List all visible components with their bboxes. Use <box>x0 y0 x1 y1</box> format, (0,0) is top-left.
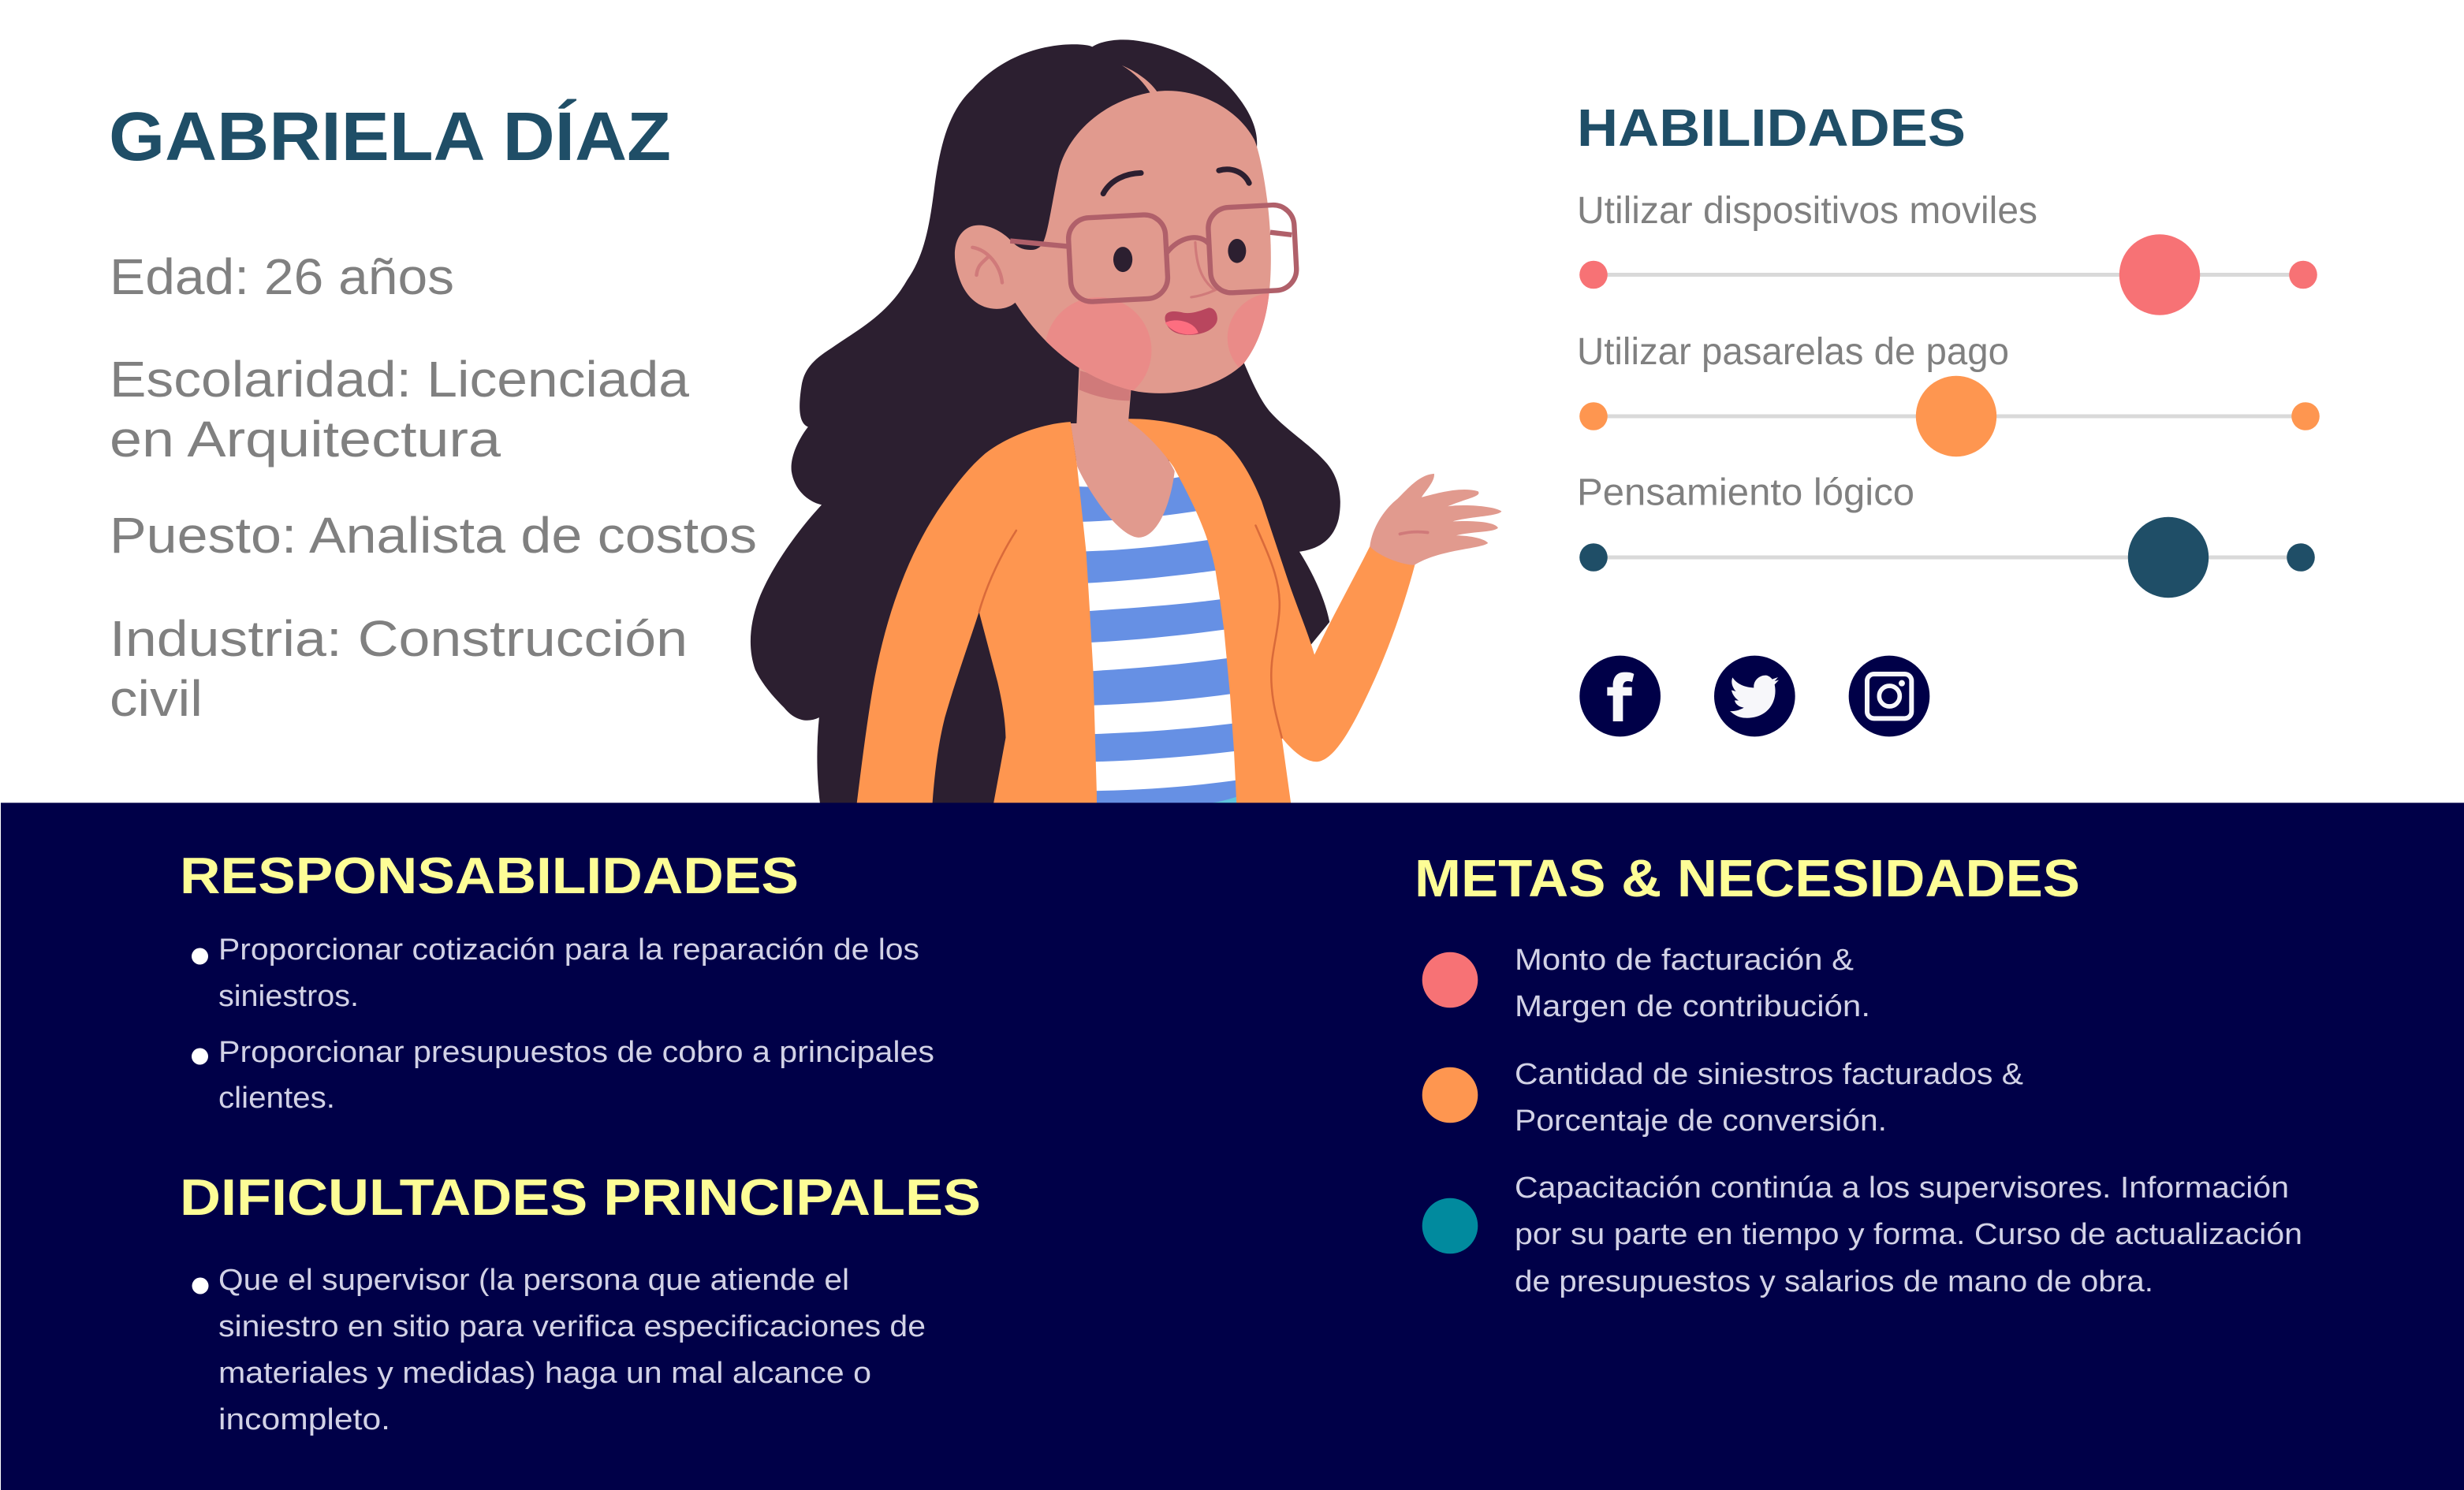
shirt stripes <box>1073 476 1242 828</box>
text block: profile details: Escolaridad: Licenciada <box>110 351 689 408</box>
goal: conversion <box>1422 1058 2023 1138</box>
title: name: GABRIELA DÍAZ <box>109 99 671 175</box>
jacket crease lines <box>979 526 1282 738</box>
illustration: woman with glasses <box>751 39 1501 828</box>
head <box>955 91 1321 404</box>
goal: capacitacion: por su parte en tiempo y forma. Curso de actualización <box>1515 1218 2302 1251</box>
skill: pensamiento logico <box>1577 471 2315 598</box>
panel: navy background <box>1 803 2464 1490</box>
cheeks <box>1046 293 1269 391</box>
goal: facturacion: Monto de facturación & <box>1515 944 1854 977</box>
neck and chest <box>1071 366 1175 538</box>
goal: capacitacion: de presupuestos y salarios de mano de obra. <box>1515 1265 2153 1298</box>
goal: capacitacion: Capacitación continúa a los supervisores. Información <box>1515 1172 2289 1205</box>
list: responsabilidades: clientes. <box>218 1082 335 1115</box>
list: dificultades: materiales y medidas) haga un mal alcance o <box>218 1357 871 1390</box>
skill: pasarelas de pago <box>1577 331 2320 456</box>
shirt hem accent <box>1206 796 1240 828</box>
icon: twitter <box>1714 656 1795 736</box>
list: responsabilidades: siniestros. <box>218 980 359 1013</box>
text block: profile details: Industria: Construcción <box>110 610 688 667</box>
list: dificultades: incompleto. <box>218 1403 390 1436</box>
mouth <box>1165 307 1217 335</box>
face <box>1008 91 1271 393</box>
goal: conversion: Cantidad de siniestros facturados & <box>1515 1058 2023 1091</box>
list: responsabilidades <box>192 933 934 1115</box>
skill: dispositivos moviles: Utilizar dispositivos moviles <box>1577 190 2037 232</box>
text block: profile details: civil <box>110 670 203 727</box>
ear lines <box>972 248 1002 282</box>
eyebrows <box>1103 169 1249 194</box>
left jacket panel <box>857 422 1097 828</box>
list: dificultades <box>192 1264 926 1436</box>
list: dificultades: siniestro en sitio para verifica especificaciones de <box>218 1310 926 1343</box>
goal: capacitacion <box>1422 1172 2302 1298</box>
social icons <box>1579 656 1929 736</box>
goal: conversion: Porcentaje de conversión. <box>1515 1104 1887 1138</box>
icon: instagram <box>1849 656 1929 736</box>
right jacket panel and arm <box>1128 419 1415 828</box>
forehead strand <box>1122 65 1158 95</box>
skill: pensamiento logico: Pensamiento lógico <box>1577 471 1914 514</box>
text block: profile details: en Arquitectura <box>110 411 501 467</box>
list: dificultades: Que el supervisor (la persona que atiende el <box>218 1264 849 1297</box>
text block: profile details: Puesto: Analista de costos <box>110 507 757 564</box>
shirt <box>1075 461 1244 828</box>
eyes <box>1113 239 1246 272</box>
list: responsabilidades: Proporcionar cotización para la reparación de los <box>218 933 919 967</box>
icon: facebook <box>1579 656 1661 736</box>
nose <box>1191 242 1215 297</box>
tongue <box>1165 320 1198 334</box>
goal: facturacion: Margen de contribución. <box>1515 990 1870 1023</box>
text block: profile details <box>110 248 757 727</box>
heading: dificultades principales: DIFICULTADES PRINCIPALES <box>180 1168 981 1226</box>
text block: profile details: Edad: 26 años <box>110 248 454 305</box>
skill: dispositivos moviles <box>1577 190 2317 315</box>
hand <box>1370 474 1501 565</box>
list: responsabilidades: Proporcionar presupuestos de cobro a principales <box>218 1036 934 1069</box>
heading: responsabilidades: RESPONSABILIDADES <box>180 847 799 904</box>
neck shadow <box>1079 371 1131 400</box>
heading: habilidades: HABILIDADES <box>1577 99 1966 158</box>
hair <box>751 39 1340 828</box>
goal: facturacion <box>1422 944 1870 1023</box>
glasses <box>1010 204 1298 303</box>
heading: metas y necesidades: METAS & NECESIDADES <box>1415 849 2080 908</box>
skill: pasarelas de pago: Utilizar pasarelas de pago <box>1577 331 2009 373</box>
ear <box>955 225 1043 309</box>
